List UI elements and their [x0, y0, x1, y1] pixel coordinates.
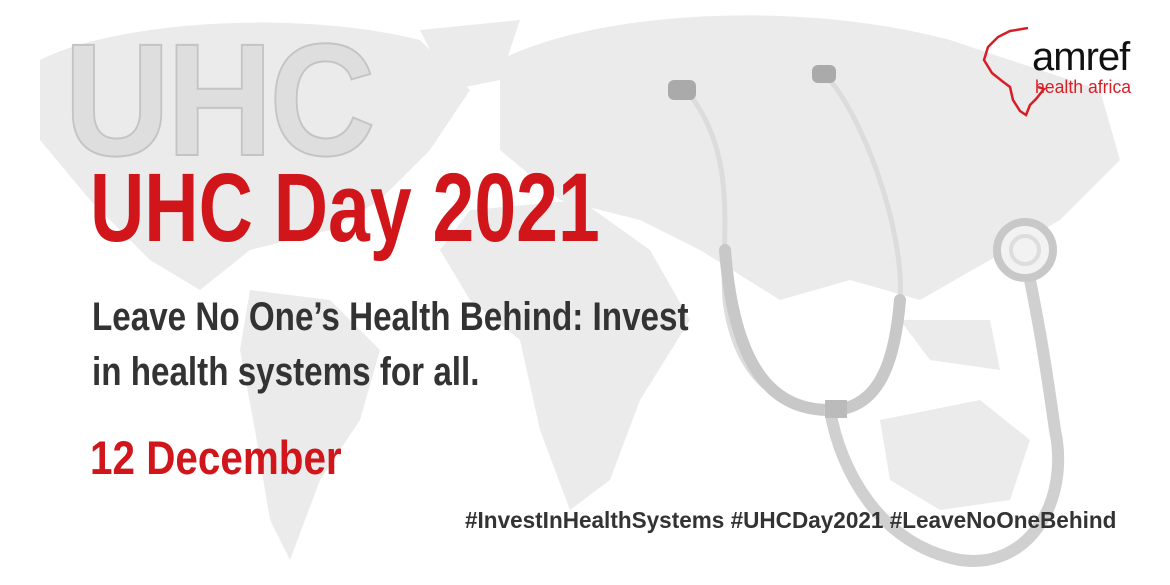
- logo: amref health africa: amref: [1032, 35, 1129, 79]
- watermark: UHC: UHC: [64, 10, 372, 189]
- subtitle: Leave No One’s Health Behind: Invest: [92, 295, 689, 339]
- subtitle: [92, 295, 689, 394]
- date: 12 December: [90, 431, 342, 484]
- logo: amref health africa: [982, 26, 1132, 117]
- logo: amref health africa: health africa: [1035, 77, 1131, 97]
- subtitle: in health systems for all.: [92, 350, 479, 394]
- title: UHC Day 2021: [90, 153, 600, 262]
- hashtags: #InvestInHealthSystems #UHCDay2021 #LeaveNoOneBehind: [465, 507, 1116, 533]
